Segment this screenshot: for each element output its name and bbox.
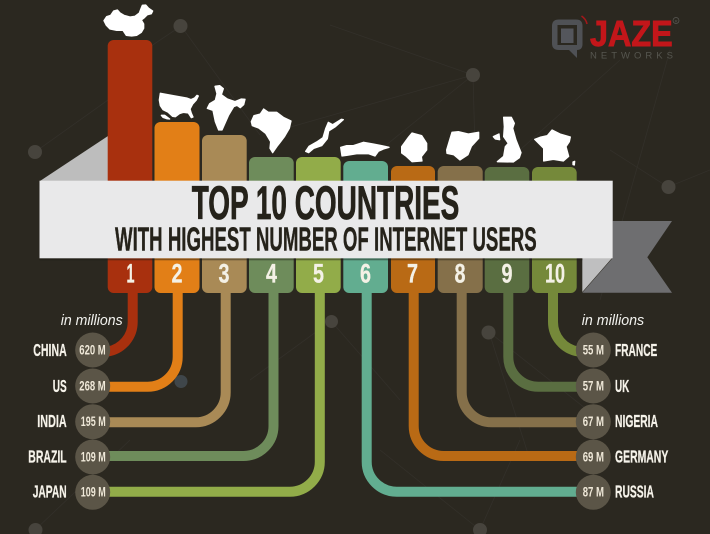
values: right: 69 M <box>583 450 604 465</box>
country labels: left: CHINA <box>33 340 67 360</box>
values: right: 57 M <box>583 378 604 394</box>
rank numbers <box>126 259 565 289</box>
icon: US map <box>159 93 198 118</box>
logo wordmark: JAZE <box>590 13 673 54</box>
values: left <box>79 343 106 500</box>
icon: Corsica <box>573 161 575 165</box>
values: left: 620 M <box>79 343 106 358</box>
rank numbers: 9 <box>502 259 512 289</box>
icon: Germany map <box>402 133 427 162</box>
value circles: left <box>75 332 110 510</box>
icon: UK map <box>497 117 521 162</box>
icon: Russia map <box>341 142 389 156</box>
country labels: right <box>615 340 668 502</box>
bar 2: US <box>154 122 200 293</box>
icon: France map <box>535 130 570 161</box>
values: right: 67 M <box>583 414 604 429</box>
bar 1: China <box>108 40 152 293</box>
bar 4: Brazil <box>249 157 294 293</box>
rank numbers: 5 <box>313 259 324 289</box>
rank numbers: 2 <box>172 259 182 289</box>
country labels: right: GERMANY <box>615 446 668 466</box>
icon: Japan map <box>306 119 343 153</box>
values: left: 268 M <box>79 378 106 394</box>
rank numbers: 10 <box>545 259 565 289</box>
values: right: 87 M <box>583 485 604 500</box>
country labels: left <box>28 340 67 502</box>
rank numbers: 7 <box>407 259 418 289</box>
ribbon fold: left <box>40 136 108 181</box>
bar 6: Russia <box>343 161 388 293</box>
value circles: right <box>576 332 611 510</box>
rank numbers: 1 <box>126 259 134 289</box>
icon: Ireland map <box>493 134 500 140</box>
values: left: 109 M <box>81 485 106 500</box>
title: TOP 10 COUNTRIES <box>192 176 459 229</box>
country labels: left: JAPAN <box>33 482 67 502</box>
rank numbers: 4 <box>266 259 277 289</box>
values: left: 109 M <box>81 450 106 465</box>
icon: China map <box>104 5 153 36</box>
values: left: 195 M <box>81 414 106 429</box>
country labels: right: RUSSIA <box>615 482 654 502</box>
connector lines: left group <box>105 285 320 492</box>
country labels: right: UK <box>615 376 630 396</box>
icon: Brazil map <box>251 109 291 153</box>
rank numbers: 3 <box>218 259 230 289</box>
rank numbers: 8 <box>454 259 466 289</box>
unit label: right: in millions <box>582 313 644 329</box>
country labels: right: FRANCE <box>615 340 657 360</box>
logo: Jaze Networks <box>552 13 679 61</box>
rank numbers: 6 <box>360 259 371 289</box>
icon: Nigeria map <box>447 132 479 160</box>
map icons: first five countries <box>104 5 343 153</box>
values: right: 55 M <box>583 343 604 358</box>
bar 8: Nigeria <box>438 166 483 293</box>
bar 7: Germany <box>391 166 435 293</box>
icon: logo speech square <box>552 16 587 58</box>
icon: Alaska and Hawaii <box>161 115 170 119</box>
map icons: last five countries <box>341 117 575 165</box>
bar 10: France <box>532 167 577 293</box>
icon: India map <box>207 86 245 130</box>
ribbon tail: right <box>582 221 672 293</box>
country labels: left: INDIA <box>37 411 67 431</box>
unit label: left: in millions <box>61 313 123 329</box>
country labels: right: NIGERIA <box>615 411 658 431</box>
bar 9: UK <box>485 167 529 293</box>
registered mark: R <box>675 18 678 24</box>
bar 3: India <box>202 135 247 293</box>
logo tagline: NETWORKS <box>590 50 673 61</box>
values: right <box>583 343 604 500</box>
title banner <box>40 176 613 260</box>
connector lines: right group <box>367 285 585 492</box>
country labels: left: BRAZIL <box>28 446 67 466</box>
bar 5: Japan <box>296 157 341 293</box>
country labels: left: US <box>53 376 67 396</box>
